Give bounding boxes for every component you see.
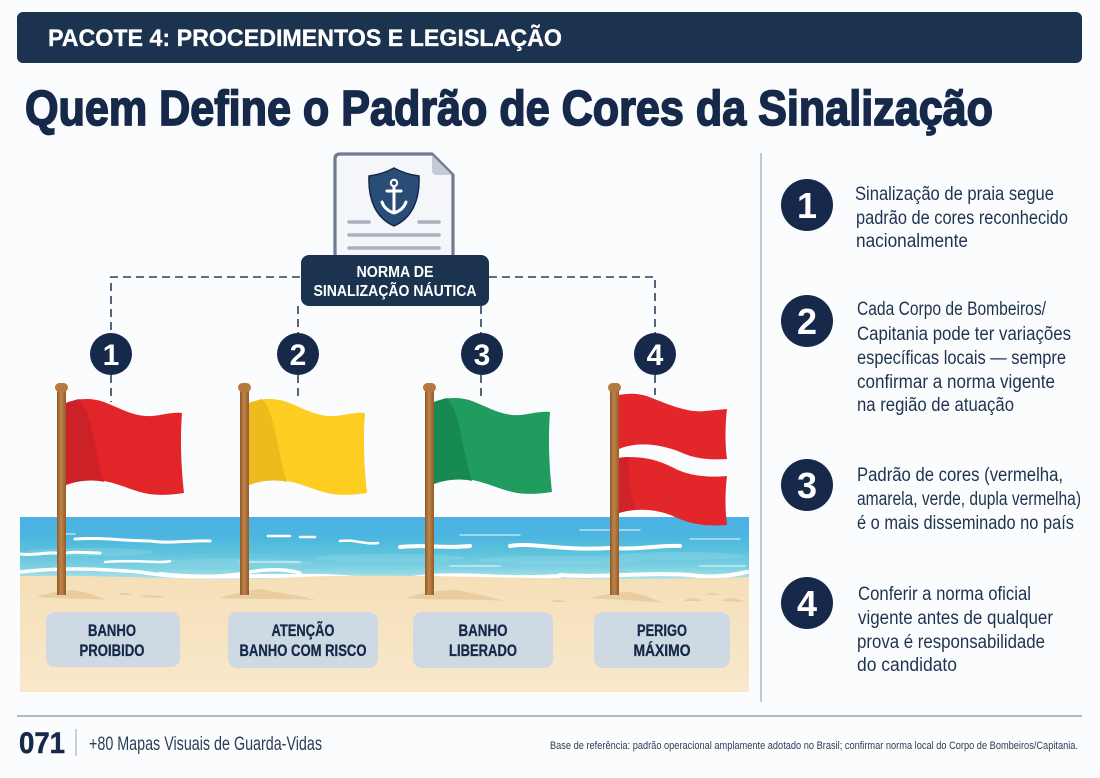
note 2 — [781, 295, 1071, 416]
footer: series name: +80 Mapas Visuais de Guarda-Vidas — [89, 734, 322, 755]
label: atenção banho com risco: ATENÇÃO — [272, 620, 335, 640]
step badge 2: 2 — [290, 339, 306, 372]
label: perigo máximo: PERIGO — [637, 622, 687, 640]
connector lines — [111, 277, 655, 402]
note 2: específicas locais — sempre — [857, 348, 1066, 369]
label: banho liberado — [413, 612, 553, 668]
header bar: PACOTE 4: PROCEDIMENTOS E LEGISLAÇÃO — [48, 24, 562, 52]
note 3: 3 — [797, 465, 817, 506]
note 2: na região de atuação — [857, 395, 1014, 416]
label: banho proibido — [46, 612, 180, 667]
note 1: nacionalmente — [856, 231, 968, 252]
note 1: padrão de cores reconhecido — [856, 208, 1068, 229]
step badge 4 — [634, 333, 676, 375]
label: banho proibido: PROIBIDO — [80, 642, 145, 660]
label: perigo máximo: MÁXIMO — [634, 641, 691, 660]
norm label: NORMA DE — [356, 264, 434, 281]
step badge 1: 1 — [103, 339, 119, 372]
header bar — [17, 12, 1082, 63]
label: banho liberado: BANHO — [458, 622, 508, 640]
label: atenção banho com risco: BANHO COM RISCO — [240, 642, 367, 660]
step badge 2 — [277, 333, 319, 375]
flag 2: yellow — [238, 333, 367, 595]
title: Quem Define o Padrão de Cores da Sinalização — [25, 82, 993, 136]
note 4: vigente antes de qualquer — [858, 608, 1054, 629]
document icon — [335, 154, 453, 262]
label: atenção banho com risco — [228, 612, 378, 668]
note 1 — [781, 179, 1068, 252]
note 4 — [781, 577, 1054, 676]
label: banho proibido: BANHO — [88, 622, 136, 640]
note 2: confirmar a norma vigente — [857, 372, 1055, 393]
note 2: Cada Corpo de Bombeiros/ — [857, 299, 1047, 320]
flag 3: green — [423, 333, 552, 595]
note 2: Capitania pode ter variações — [857, 324, 1071, 345]
note 3 — [781, 459, 1081, 534]
note 1: 1 — [797, 185, 817, 226]
label: perigo máximo — [594, 612, 730, 668]
beach scene — [20, 517, 749, 692]
norm label: SINALIZAÇÃO NÁUTICA — [314, 282, 476, 300]
step badge 3: 3 — [474, 339, 490, 372]
note 4: prova é responsabilidade — [857, 632, 1045, 653]
step badge 1 — [90, 333, 132, 375]
footer: page number: 071 — [19, 727, 65, 760]
note 2: 2 — [797, 301, 817, 342]
note 3: Padrão de cores (vermelha, — [857, 465, 1063, 486]
note 1: Sinalização de praia segue — [855, 184, 1054, 205]
label: banho liberado: LIBERADO — [449, 642, 517, 660]
norm label — [301, 255, 489, 306]
note 4: do candidato — [857, 655, 957, 676]
flag 1: red — [55, 333, 184, 595]
flag 4: double red — [608, 333, 727, 595]
note 4: 4 — [797, 583, 817, 624]
note 4: Conferir a norma oficial — [858, 584, 1031, 605]
step badge 4: 4 — [647, 339, 664, 372]
step badge 3 — [461, 333, 503, 375]
